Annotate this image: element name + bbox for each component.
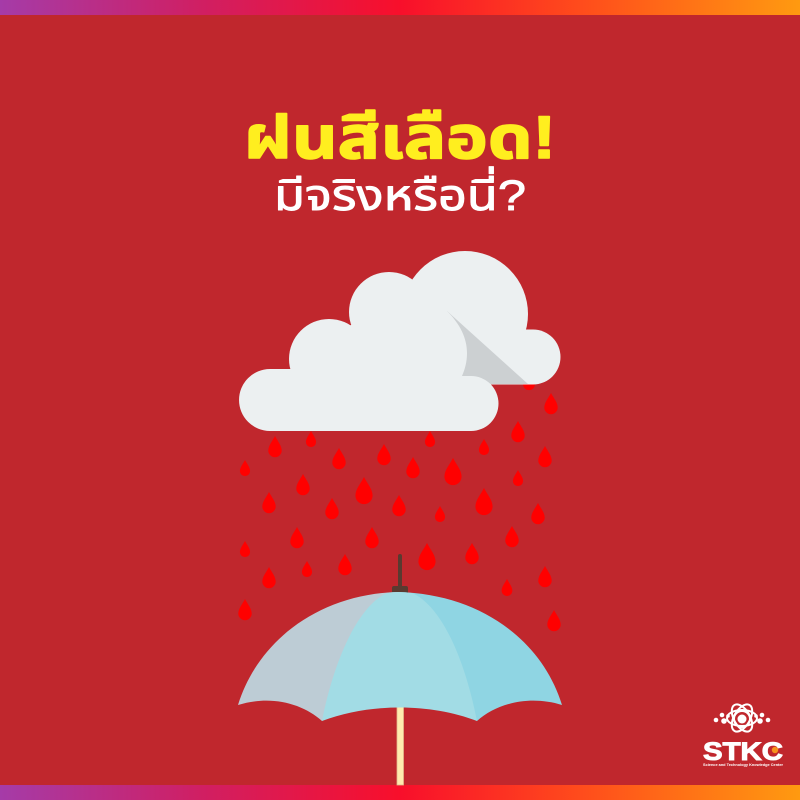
subtitle: มีจริงหรือนี่?	[274, 166, 526, 220]
logo side dots	[714, 713, 770, 724]
logo atom icon	[727, 701, 757, 735]
logo tagline: Science and Technology Knowledge Center	[703, 762, 783, 767]
cloud: back	[349, 251, 560, 384]
cloud: front	[239, 311, 498, 431]
umbrella top stalk	[392, 554, 408, 593]
blood rain drops	[238, 371, 561, 631]
canopy right panel	[398, 592, 562, 721]
top gradient bar	[0, 0, 800, 15]
bottom gradient bar	[0, 785, 800, 800]
umbrella handle	[397, 700, 404, 785]
umbrella	[238, 554, 562, 785]
canopy centre panel	[322, 592, 477, 721]
logo wordmark: STKC	[703, 738, 783, 766]
STKC logo	[703, 701, 783, 767]
title: ฝนสีเลือด!	[244, 104, 556, 171]
logo orange dot	[772, 747, 778, 753]
canopy left panel	[238, 592, 400, 721]
cloud shadow	[447, 311, 528, 384]
